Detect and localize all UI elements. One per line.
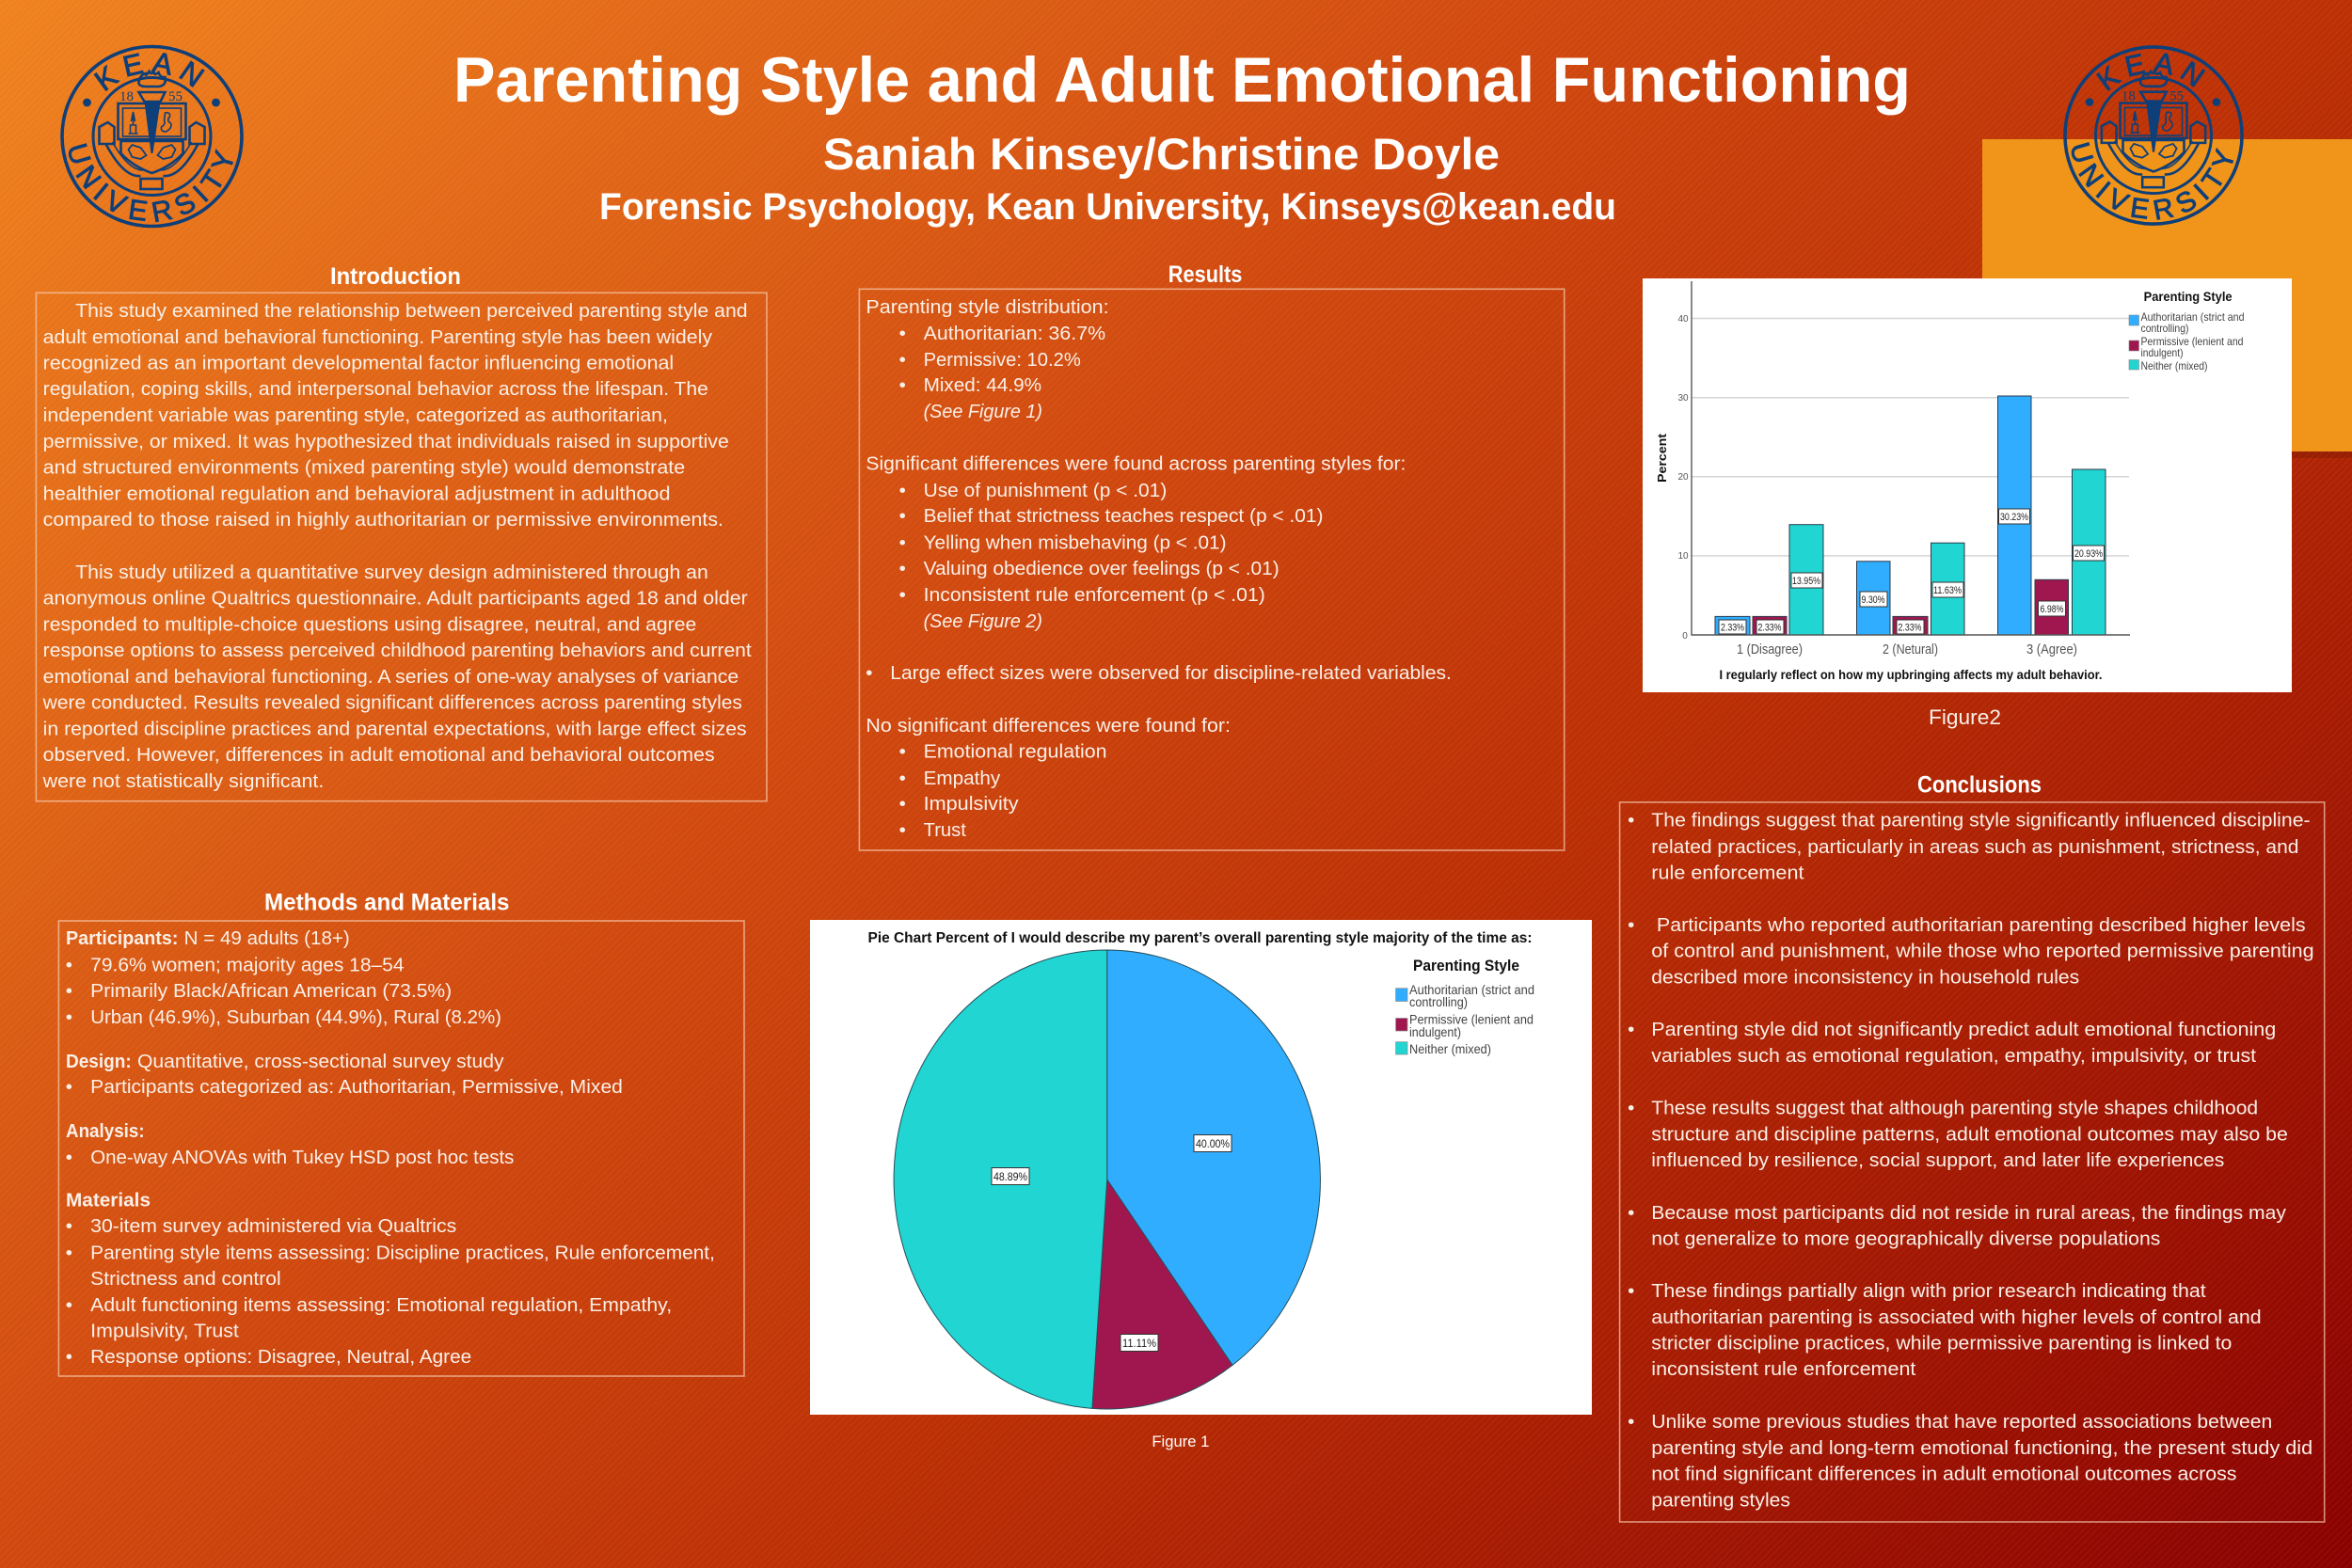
panel: results: (See Figure 2) xyxy=(924,610,1042,632)
panel: conclusions: not generalize to more geographically diverse populations xyxy=(1651,1228,2160,1250)
panel: conclusions: inconsistent rule enforcement xyxy=(1651,1358,1916,1380)
panel: methods and materials: One-way ANOVAs with Tukey HSD post hoc tests xyxy=(90,1147,514,1168)
panel: introduction: were conducted. Results revealed significant differences across parenting styles xyxy=(42,692,742,714)
panel: methods and materials: • xyxy=(66,954,72,975)
bar value labels: 30.23% xyxy=(2000,512,2028,523)
panel: introduction: observed. However, differences in adult emotional and behavioral outcomes xyxy=(43,744,715,766)
panel: results: Impulsivity xyxy=(924,793,1019,815)
panel: methods and materials: 30-item survey administered via Qualtrics xyxy=(90,1215,456,1237)
y tick labels: 40 xyxy=(1677,314,1689,325)
panel: conclusions: These results suggest that although parenting style shapes childhood xyxy=(1651,1097,2258,1119)
y axis title: Percent xyxy=(1655,433,1669,483)
icon: Kean University seal left: 18 xyxy=(119,89,134,104)
x tick labels: 1 (Disagree) xyxy=(1737,641,1803,657)
bar legend: Permissive (lenient and xyxy=(2141,335,2243,348)
panel: methods and materials: • xyxy=(66,1147,72,1168)
panel: results: • xyxy=(899,374,906,396)
panel: conclusions: not find significant differences in adult emotional outcomes across xyxy=(1651,1464,2237,1485)
affiliation: Forensic Psychology, Kean University, Kinseys@kean.edu xyxy=(599,186,1616,228)
heading: conclusions: Conclusions xyxy=(1917,771,2042,798)
panel: results: No significant differences were found for: xyxy=(866,715,1231,736)
panel: methods and materials: Strictness and control xyxy=(90,1268,281,1290)
panel: introduction: adult emotional and behavioral functioning. Parenting style has been widely xyxy=(43,326,713,348)
pie slices xyxy=(894,950,1320,1409)
bar value labels: 6.98% xyxy=(2040,604,2064,615)
panel: conclusions: related practices, particularly in areas such as punishment, strictness, and xyxy=(1651,836,2299,858)
panel: results: Inconsistent rule enforcement (p < .01) xyxy=(924,584,1265,606)
panel: introduction: responded to multiple-choice questions using disagree, neutral, and agree xyxy=(43,613,696,635)
panel: introduction: This study examined the relationship between perceived parenting style and xyxy=(75,300,748,322)
panel: results: Valuing obedience over feelings (p < .01) xyxy=(924,558,1279,579)
panel: methods and materials: Quantitative, cross-sectional survey study xyxy=(137,1051,504,1072)
panel: conclusions: rule enforcement xyxy=(1651,862,1804,884)
panel: methods and materials xyxy=(58,890,744,1376)
panel: results: Emotional regulation xyxy=(924,741,1107,763)
panel: results: Belief that strictness teaches respect (p < .01) xyxy=(924,505,1323,527)
panel: results: • xyxy=(899,505,906,527)
icon: Kean University seal right: 18 xyxy=(2122,89,2136,104)
panel: conclusions: parenting styles xyxy=(1651,1489,1790,1511)
y tick labels: 20 xyxy=(1677,472,1689,483)
icon: Kean University seal right: 55 xyxy=(2169,89,2184,104)
bar legend: indulgent) xyxy=(2141,346,2183,359)
icon: Kean University seal left: KEAN xyxy=(94,53,205,92)
panel: results: Significant differences were found across parenting styles for: xyxy=(866,453,1406,475)
panel: results: • xyxy=(899,584,906,606)
icon: Kean University seal right: UNIVERSITY xyxy=(2072,142,2233,220)
panel: results: Yelling when misbehaving (p < .01) xyxy=(924,531,1227,553)
x tick labels: 2 (Netural) xyxy=(1883,641,1938,657)
panel: conclusions: Unlike some previous studies that have reported associations between xyxy=(1651,1411,2272,1433)
panel: results: • xyxy=(899,819,906,841)
panel: introduction: compared to those raised in highly authoritarian or permissive environments. xyxy=(43,509,723,531)
x tick labels xyxy=(1737,641,2077,657)
panel: conclusions: The findings suggest that parenting style significantly influenced discipline- xyxy=(1651,809,2311,832)
pie legend: Neither (mixed) xyxy=(1409,1041,1491,1056)
panel: results: Parenting style distribution: xyxy=(866,296,1109,318)
bar legend: Parenting Style xyxy=(2144,289,2233,304)
panel: results: Use of punishment (p < .01) xyxy=(924,480,1167,501)
icon: Kean University seal left xyxy=(60,45,244,228)
heading: methods and materials: Methods and Materials xyxy=(264,890,510,916)
panel: results: • xyxy=(899,793,906,815)
bar legend: Neither (mixed) xyxy=(2141,359,2207,372)
panel: methods and materials: Participants categorized as: Authoritarian, Permissive, Mixed xyxy=(90,1076,623,1098)
panel: methods and materials: Urban (46.9%), Suburban (44.9%), Rural (8.2%) xyxy=(90,1006,501,1028)
panel: methods and materials: • xyxy=(66,980,72,1002)
panel: conclusions: • xyxy=(1628,1019,1634,1040)
panel: methods and materials: • xyxy=(66,1294,72,1316)
pie chart: figure 1 xyxy=(810,920,1592,1415)
panel: methods and materials: • xyxy=(66,1346,72,1368)
icon: Kean University seal left: 55 xyxy=(168,89,183,104)
panel: methods and materials: • xyxy=(66,1076,72,1098)
panel: results xyxy=(859,261,1565,850)
panel: results: Trust xyxy=(924,819,966,841)
panel: results: • xyxy=(899,741,906,763)
panel: results: Authoritarian: 36.7% xyxy=(924,323,1105,344)
bar value labels: 2.33% xyxy=(1757,623,1782,634)
panel: conclusions: of control and punishment, while those who reported permissive parenting xyxy=(1651,941,2314,962)
panel: results: • xyxy=(866,662,872,684)
panel: introduction: response options to assess perceived childhood parenting behaviors and current xyxy=(43,640,752,661)
panel: conclusions: stricter discipline practices, while permissive parenting is linked to xyxy=(1651,1332,2232,1354)
panel: methods and materials: Adult functioning items assessing: Emotional regulation, Empathy, xyxy=(90,1294,672,1316)
panel: results: Permissive: 10.2% xyxy=(924,349,1081,371)
panel: methods and materials: Analysis: xyxy=(66,1120,145,1142)
pie legend xyxy=(1396,957,1534,1056)
panel: methods and materials: Primarily Black/African American (73.5%) xyxy=(90,980,452,1002)
panel: conclusions: parenting style and long-term emotional functioning, the present study did xyxy=(1651,1437,2312,1459)
panel: conclusions: • xyxy=(1628,1202,1634,1224)
pie legend: Parenting Style xyxy=(1413,957,1519,974)
panel: conclusions: authoritarian parenting is associated with higher levels of control and xyxy=(1651,1307,2262,1328)
panel: introduction: anonymous online Qualtrics questionnaire. Adult participants aged 18 and older xyxy=(43,587,748,609)
icon: Kean University seal right xyxy=(2063,45,2244,226)
panel: conclusions: Parenting style did not significantly predict adult emotional functioning xyxy=(1651,1019,2276,1040)
panel: results: • xyxy=(899,349,906,371)
bar chart: figure 2 xyxy=(1643,278,2292,692)
slice value labels: 11.11% xyxy=(1122,1337,1156,1350)
y tick labels: 10 xyxy=(1677,551,1689,562)
panel: methods and materials: • xyxy=(66,1242,72,1263)
panel: conclusions: • xyxy=(1628,809,1634,832)
pie legend: controlling) xyxy=(1409,994,1468,1009)
panel: introduction: This study utilized a quantitative survey design administered through an xyxy=(75,562,708,583)
panel: conclusions: structure and discipline patterns, adult emotional outcomes may also be xyxy=(1651,1124,2288,1146)
panel: conclusions: • xyxy=(1628,1097,1634,1119)
panel: results: • xyxy=(899,323,906,344)
panel: introduction: recognized as an important developmental factor influencing emotional xyxy=(43,352,674,374)
panel: conclusions: • xyxy=(1628,1280,1634,1302)
panel: methods and materials: N = 49 adults (18+) xyxy=(184,927,350,949)
panel: results: Empathy xyxy=(924,768,1001,789)
panel: conclusions: • xyxy=(1628,914,1634,936)
grid lines xyxy=(1692,318,2129,556)
panel: conclusions: described more inconsistency in household rules xyxy=(1651,966,2079,988)
panel: methods and materials: Response options: Disagree, Neutral, Agree xyxy=(90,1346,471,1368)
title: Parenting Style and Adult Emotional Functioning xyxy=(453,44,1911,116)
panel: results: Large effect sizes were observed for discipline-related variables. xyxy=(890,662,1452,684)
heading: results: Results xyxy=(1168,261,1242,288)
panel: introduction: independent variable was parenting style, categorized as authoritarian, xyxy=(43,404,668,426)
y tick labels xyxy=(1677,314,1689,641)
panel: methods and materials: • xyxy=(66,1215,72,1237)
panel: results: • xyxy=(899,480,906,501)
panel: methods and materials: 79.6% women; majority ages 18–54 xyxy=(90,954,404,975)
panel: methods and materials: Impulsivity, Trust xyxy=(90,1320,239,1341)
x tick labels: 3 (Agree) xyxy=(2026,641,2077,657)
bar legend xyxy=(2129,289,2245,372)
icon: Kean University seal left: UNIVERSITY xyxy=(68,143,233,222)
panel: conclusions: variables such as emotional regulation, empathy, impulsivity, or trust xyxy=(1651,1045,2256,1067)
chart title: Pie Chart Percent of I would describe my parent’s overall parenting style majority of the time as: xyxy=(867,930,1532,946)
panel: conclusions: Participants who reported authoritarian parenting described higher levels xyxy=(1657,914,2306,936)
panel: introduction: regulation, coping skills, and interpersonal behavior across the lifespan. The xyxy=(43,378,708,400)
caption: figure 1: Figure 1 xyxy=(1152,1433,1209,1450)
bar legend: Authoritarian (strict and xyxy=(2141,310,2245,324)
panel: introduction: emotional and behavioral functioning. A series of one-way analyses of variance xyxy=(43,666,739,688)
slice value labels: 40.00% xyxy=(1196,1137,1230,1150)
panel: introduction: in reported discipline practices and parental expectations, with large effect sizes xyxy=(43,718,747,739)
panel: conclusions: These findings partially align with prior research indicating that xyxy=(1651,1280,2206,1302)
panel: results: Mixed: 44.9% xyxy=(924,374,1041,396)
caption: figure 2: Figure2 xyxy=(1929,705,2001,729)
panel: introduction: and structured environments (mixed parenting style) would demonstrate xyxy=(43,456,685,478)
icon: Kean University seal right: KEAN xyxy=(2096,53,2205,91)
panel: conclusions: • xyxy=(1628,1411,1634,1433)
bar value labels: 13.95% xyxy=(1792,576,1820,587)
y tick labels: 30 xyxy=(1677,393,1689,404)
author: Saniah Kinsey/Christine Doyle xyxy=(823,129,1500,179)
bar value labels: 11.63% xyxy=(1933,585,1962,596)
panel: results: (See Figure 1) xyxy=(924,401,1042,422)
pie legend: indulgent) xyxy=(1409,1024,1461,1039)
bar value labels xyxy=(1719,509,2104,634)
panel: methods and materials: Design: xyxy=(66,1051,132,1072)
bar value labels: 2.33% xyxy=(1899,623,1922,634)
slice value labels xyxy=(992,1134,1232,1351)
panel: conclusions xyxy=(1620,771,2325,1522)
heading: introduction: Introduction xyxy=(330,263,461,290)
panel: methods and materials: Parenting style items assessing: Discipline practices, Rule enforcement, xyxy=(90,1242,715,1263)
slice value labels: 48.89% xyxy=(993,1170,1027,1183)
panel: methods and materials: Participants: xyxy=(66,927,178,949)
panel: conclusions: Because most participants did not reside in rural areas, the findings may xyxy=(1651,1202,2287,1224)
bars xyxy=(1715,396,2106,635)
panel: results: • xyxy=(899,531,906,553)
panel: conclusions: influenced by resilience, social support, and later life experiences xyxy=(1651,1149,2224,1171)
panel: introduction: healthier emotional regulation and behavioral adjustment in adulthood xyxy=(43,483,670,504)
pie legend: Permissive (lenient and xyxy=(1409,1012,1534,1027)
panel: introduction: permissive, or mixed. It was hypothesized that individuals raised in supportive xyxy=(43,431,729,452)
panel: introduction xyxy=(36,263,767,801)
axes xyxy=(1692,281,2130,635)
panel: methods and materials: Materials xyxy=(66,1190,151,1212)
panel: results: • xyxy=(899,768,906,789)
pie legend: Authoritarian (strict and xyxy=(1409,982,1534,997)
panel: results: • xyxy=(899,558,906,579)
bar legend: controlling) xyxy=(2141,322,2188,335)
bar value labels: 20.93% xyxy=(2074,548,2103,560)
panel: methods and materials: • xyxy=(66,1006,72,1028)
bar value labels: 2.33% xyxy=(1721,623,1744,634)
x axis title: I regularly reflect on how my upbringing affects my adult behavior. xyxy=(1720,667,2102,682)
bar value labels: 9.30% xyxy=(1861,594,1885,606)
decorative orange block xyxy=(1982,139,2352,458)
panel: introduction: were not statistically significant. xyxy=(42,770,324,792)
y tick labels: 0 xyxy=(1682,631,1688,641)
